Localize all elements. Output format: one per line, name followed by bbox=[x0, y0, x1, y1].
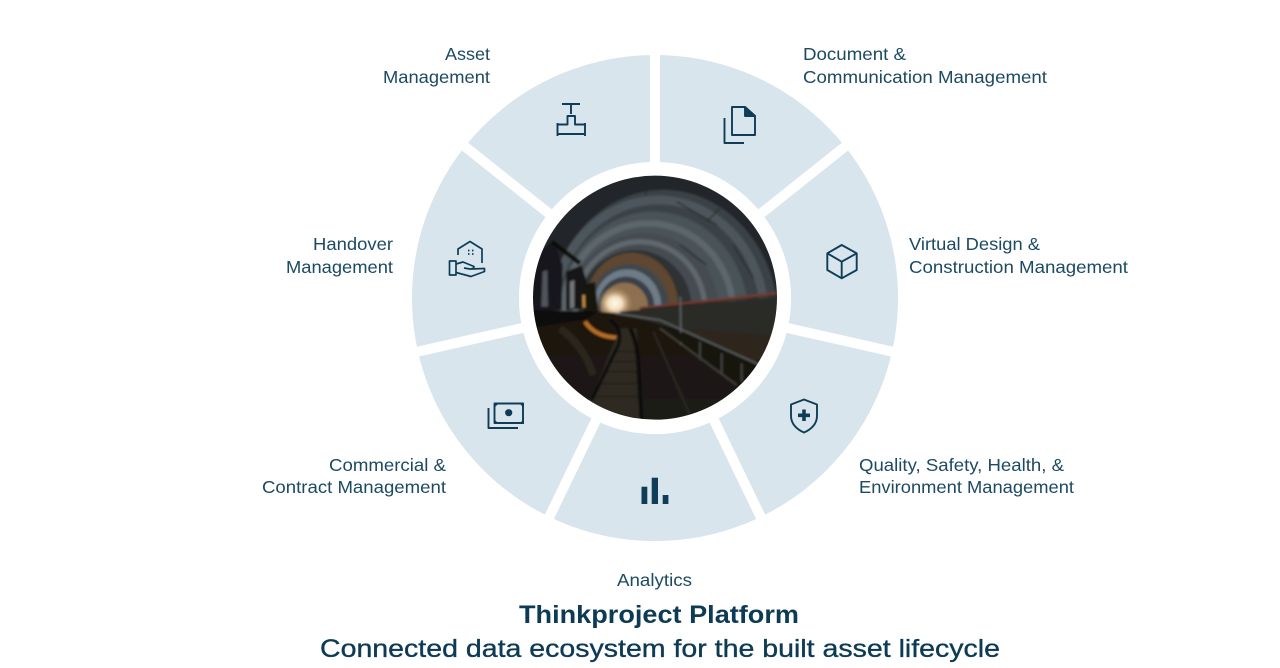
title: Thinkproject Platform bbox=[519, 601, 799, 629]
label: document and communication management: Document & bbox=[803, 44, 906, 64]
dark ledge bbox=[530, 310, 598, 328]
label: handover management: Management bbox=[286, 257, 393, 277]
left floor curves bbox=[560, 328, 593, 375]
label: asset management: Asset bbox=[445, 44, 490, 64]
pole bbox=[678, 297, 683, 345]
left wall pillars bbox=[530, 240, 563, 312]
icon: banknotes bbox=[488, 403, 524, 428]
icon: hand holding house bbox=[450, 242, 484, 276]
ring of segments bbox=[466, 108, 844, 488]
subtitle: Connected data ecosystem for the built asset lifecycle bbox=[320, 635, 1000, 663]
center photo: tunnel bbox=[533, 176, 777, 420]
orange glow bbox=[585, 322, 617, 338]
wheel of seven segments bbox=[403, 40, 907, 530]
label: asset management: Management bbox=[383, 67, 490, 87]
icon: shield with plus bbox=[791, 400, 817, 432]
rails bbox=[592, 320, 620, 400]
pipe bbox=[640, 293, 777, 308]
label: virtual design and construction management: Construction Management bbox=[909, 257, 1128, 277]
label: virtual design and construction management: Virtual Design & bbox=[909, 234, 1040, 254]
icon: bar chart bbox=[642, 478, 668, 504]
label: document and communication management: Communication Management bbox=[803, 67, 1047, 87]
track bed bbox=[588, 328, 644, 422]
label: quality safety health environment management: Quality, Safety, Health, & bbox=[859, 455, 1064, 475]
icon: valve (asset management) bbox=[558, 104, 585, 136]
floor bbox=[536, 310, 760, 420]
label: handover management: Handover bbox=[313, 234, 393, 254]
radial seams bbox=[645, 192, 753, 278]
label: commercial and contract management: Commercial & bbox=[329, 455, 446, 475]
icon: cube bbox=[827, 245, 857, 278]
right wall bbox=[619, 296, 777, 340]
label: commercial and contract management: Contract Management bbox=[262, 477, 446, 497]
label: quality safety health environment management: Environment Management bbox=[859, 477, 1074, 497]
icon: documents bbox=[724, 107, 755, 143]
label: analytics: Analytics bbox=[617, 570, 692, 590]
railing bbox=[678, 332, 756, 384]
